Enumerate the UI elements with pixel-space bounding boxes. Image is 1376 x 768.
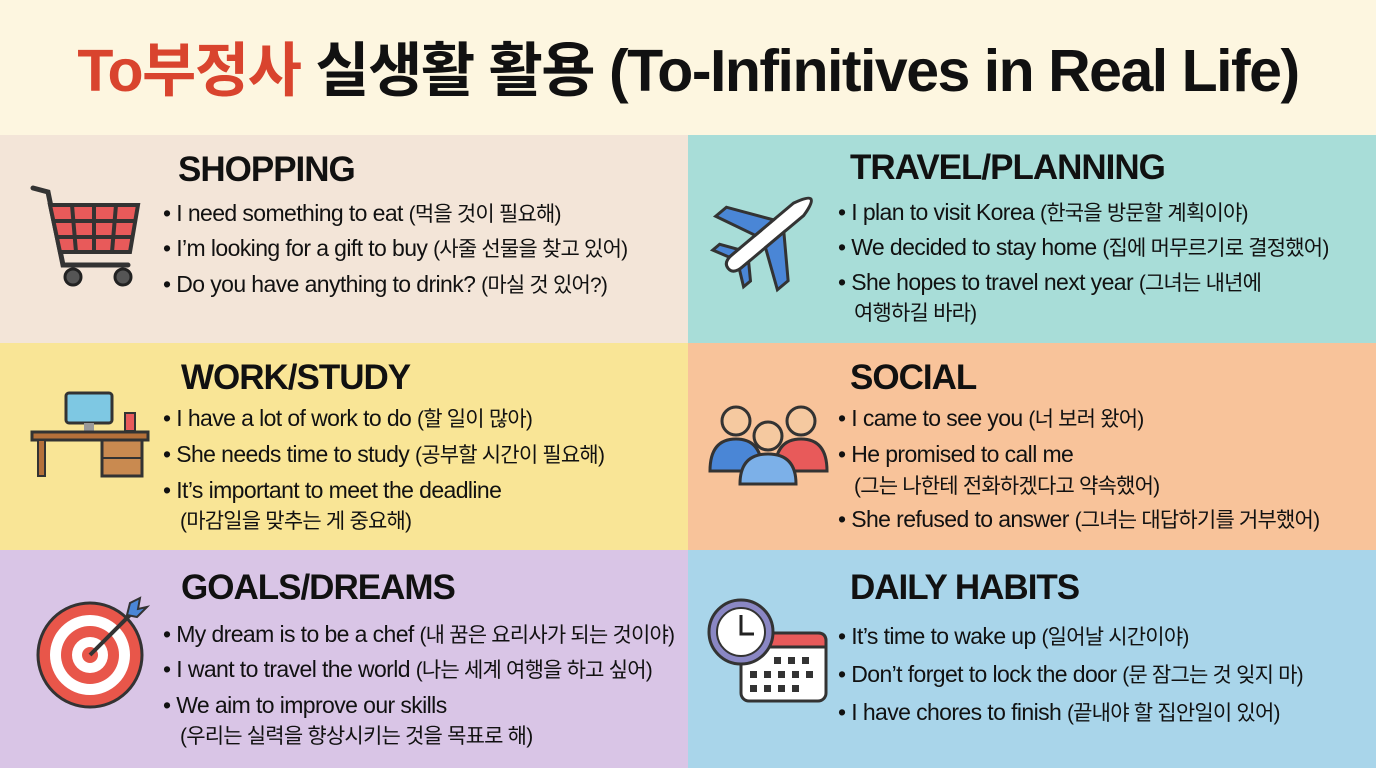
bullet list: work: • She needs time to study (공부할 시간이 필요해)	[163, 441, 604, 467]
bullet list: work: • It’s important to meet the deadline	[163, 477, 501, 503]
bullet list: shopping	[163, 200, 627, 297]
bullet list: goals: (우리는 실력을 향상시키는 것을 목표로 해)	[180, 725, 532, 748]
bullet list: goals: • I want to travel the world (나는 세계 여행을 하고 싶어)	[163, 656, 652, 682]
icon: target	[36, 596, 150, 708]
bullet list: travel	[838, 199, 1329, 325]
bullet list: social: (그는 나한테 전화하겠다고 약속했어)	[854, 475, 1159, 498]
icon: clock and calendar	[708, 598, 828, 702]
icon: shopping cart	[30, 186, 140, 286]
bullet list: work	[163, 405, 604, 533]
bullet list: goals: • My dream is to be a chef (내 꿈은 요리사가 되는 것이야)	[163, 621, 674, 647]
panel: goals/dreams	[0, 550, 688, 768]
panel: social	[688, 343, 1376, 550]
heading: shopping: SHOPPING	[178, 150, 355, 189]
heading: social: SOCIAL	[850, 358, 976, 397]
bullet list: shopping: • I’m looking for a gift to buy (사줄 선물을 찾고 있어)	[163, 235, 627, 261]
bullet list: social: • She refused to answer (그녀는 대답하기를 거부했어)	[838, 506, 1319, 532]
bullet list: shopping: • Do you have anything to drink? (마실 것 있어?)	[163, 271, 607, 297]
heading: daily habits: DAILY HABITS	[850, 568, 1079, 607]
panel: travel/planning	[688, 135, 1376, 343]
bullet list: daily: • I have chores to finish (끝내야 할 집안일이 있어)	[838, 699, 1280, 725]
bullet list: social: • I came to see you (너 보러 왔어)	[838, 405, 1143, 431]
bullet list: travel: 여행하길 바라)	[854, 302, 976, 325]
bullet list: shopping: • I need something to eat (먹을 것이 필요해)	[163, 200, 561, 226]
title: To부정사 실생활 활용 (To-Infinitives in Real Life)	[77, 38, 1299, 104]
heading: travel/planning: TRAVEL/PLANNING	[850, 148, 1165, 187]
bullet list: social: • He promised to call me	[838, 441, 1073, 467]
bullet list: travel: • I plan to visit Korea (한국을 방문할 계획이야)	[838, 199, 1248, 225]
panel: daily habits	[688, 550, 1376, 768]
icon: airplane	[710, 196, 813, 292]
bullet list: travel: • She hopes to travel next year (그녀는 내년에	[838, 269, 1261, 295]
bullet list: daily: • Don’t forget to lock the door (문 잠그는 것 잊지 마)	[838, 661, 1303, 687]
bullet list: social	[838, 405, 1319, 532]
bullet list: goals: • We aim to improve our skills	[163, 692, 447, 718]
bullet list: work: • I have a lot of work to do (할 일이 많아)	[163, 405, 532, 431]
heading: goals/dreams: GOALS/DREAMS	[181, 568, 455, 607]
panel: shopping	[0, 135, 688, 343]
panel: work/study	[0, 343, 688, 550]
bullet list: travel: • We decided to stay home (집에 머무르기로 결정했어)	[838, 234, 1329, 260]
bullet list: daily	[838, 623, 1303, 725]
bullet list: goals	[163, 621, 674, 748]
icon: people	[708, 406, 828, 486]
bullet list: work: (마감일을 맞추는 게 중요해)	[180, 510, 411, 533]
heading: work/study: WORK/STUDY	[181, 358, 410, 397]
bullet list: daily: • It’s time to wake up (일어날 시간이야)	[838, 623, 1189, 649]
icon: desk	[30, 392, 150, 478]
